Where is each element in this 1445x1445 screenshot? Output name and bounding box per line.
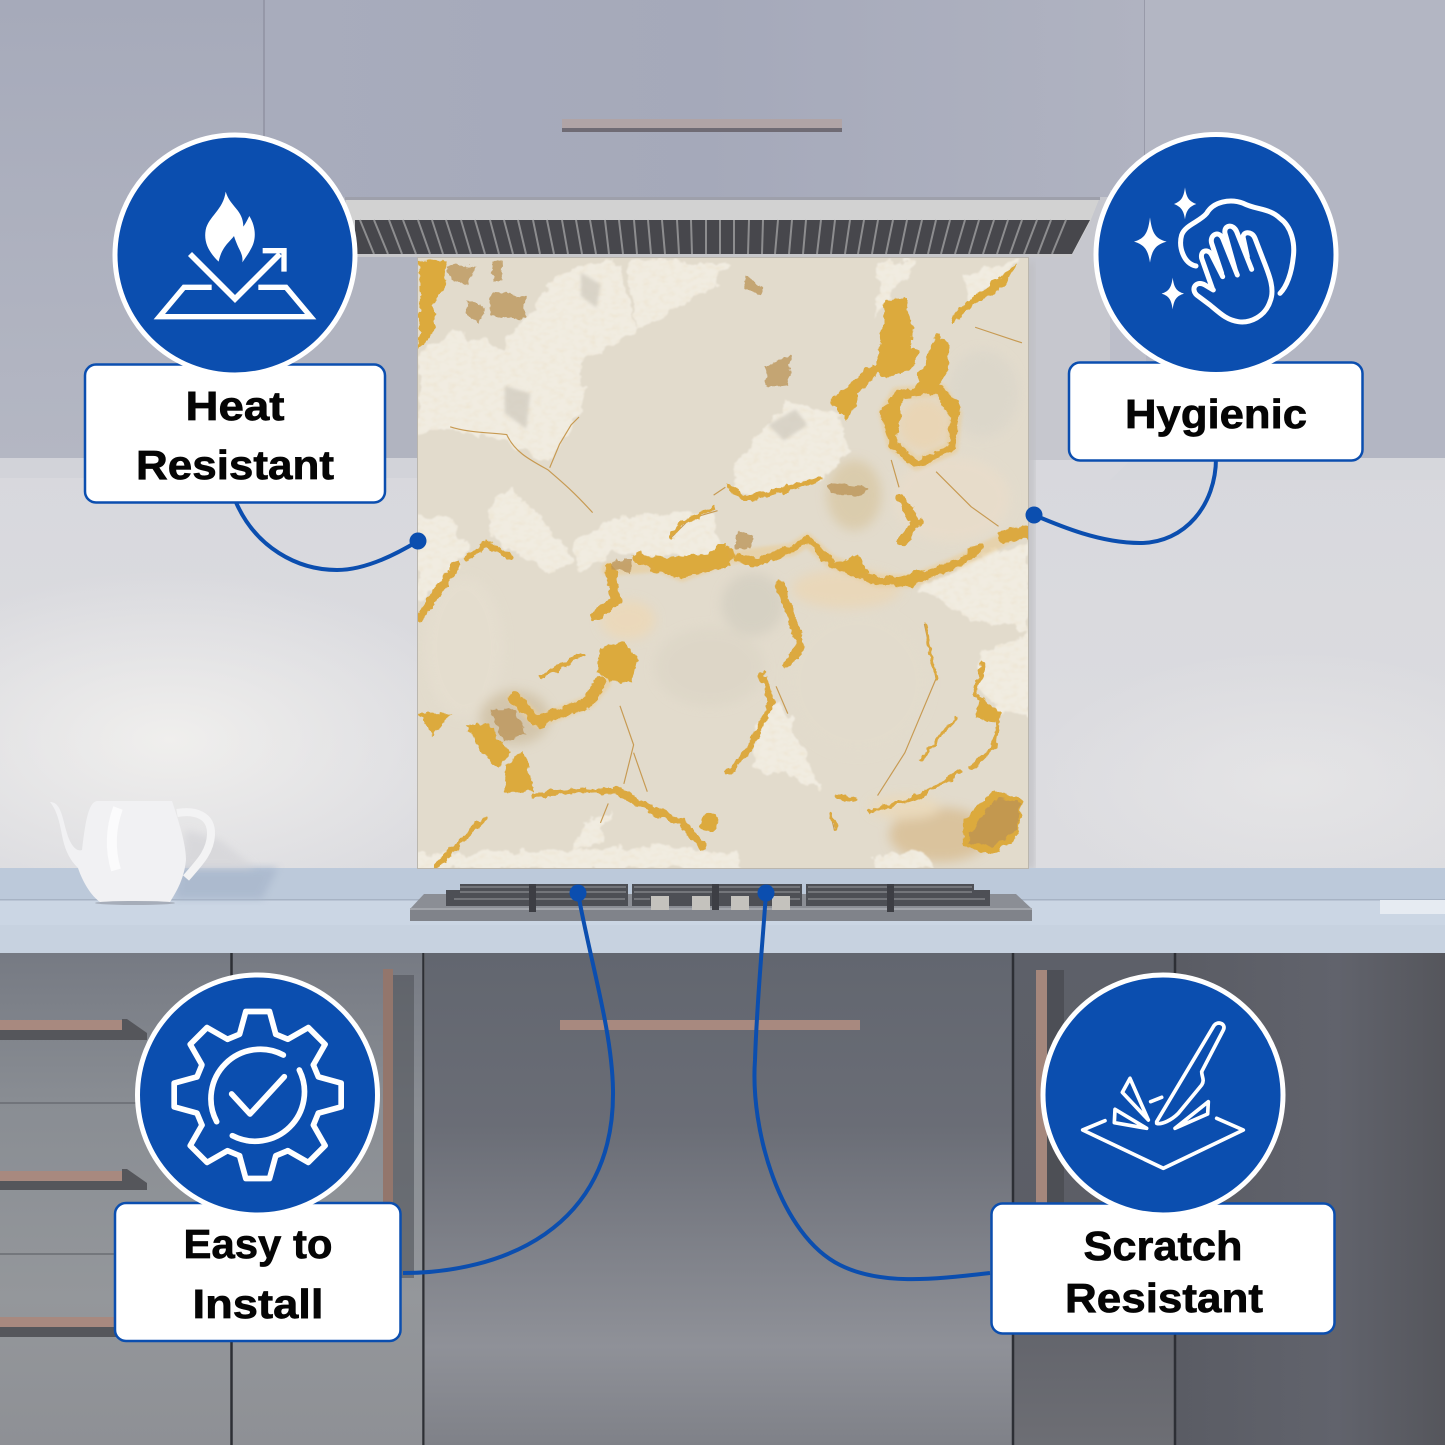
marble gold veins (419, 370, 1026, 866)
heading: Heat (186, 383, 285, 429)
badge (1096, 134, 1336, 374)
badge (1043, 975, 1283, 1215)
label box (115, 1203, 400, 1341)
callout: Heat Resistant (85, 135, 426, 570)
heading: Resistant (1065, 1275, 1263, 1321)
heading (1065, 1223, 1263, 1321)
heading: Easy to (184, 1221, 332, 1267)
icon: hand wiping with sparkles (1134, 187, 1294, 322)
label box (1069, 362, 1362, 460)
connector: Heat Resistant (235, 500, 426, 570)
marble panel (417, 257, 1029, 869)
icon: flame over heat-deflecting surface (159, 192, 311, 317)
heading: Resistant (136, 442, 334, 488)
connector: Scratch Resistant (754, 884, 990, 1279)
upper right cabinet (1145, 0, 1445, 458)
marble soft shading (477, 398, 986, 867)
badge (115, 135, 355, 375)
label box (992, 1204, 1334, 1334)
cooker hood (345, 197, 1100, 257)
stove (410, 884, 1032, 921)
drawer and door handles (0, 969, 1064, 1337)
badge (138, 975, 378, 1215)
heading (136, 383, 334, 488)
marble thin veins (450, 327, 1022, 831)
label box (85, 364, 385, 502)
connector: Hygienic (1026, 458, 1216, 543)
heading: Install (192, 1281, 324, 1327)
heading (184, 1221, 332, 1327)
callout: Hygienic (1026, 134, 1362, 543)
upper wall behind hood (330, 190, 1130, 460)
marble warm halo (515, 390, 1014, 721)
base cabinets (0, 953, 1445, 1445)
top cabinet handle (562, 119, 842, 132)
marble white crystal zones (417, 261, 1029, 869)
marble gold blocks (419, 261, 1022, 854)
upper left cabinet (0, 0, 264, 458)
upper centre cabinet (264, 0, 1145, 197)
counter (0, 868, 1445, 953)
callout: Easy to Install (115, 884, 613, 1341)
teapot (50, 801, 278, 905)
callout: Scratch Resistant (754, 884, 1334, 1334)
icon: gear with check mark (174, 1011, 341, 1178)
marble brown patches (448, 261, 1020, 846)
backsplash shadow (1026, 262, 1034, 870)
icon: knife scratching surface (1083, 1023, 1243, 1168)
heading: Scratch (1084, 1223, 1242, 1269)
connector: Easy to Install (403, 884, 613, 1273)
heading: Hygienic (1125, 391, 1307, 437)
